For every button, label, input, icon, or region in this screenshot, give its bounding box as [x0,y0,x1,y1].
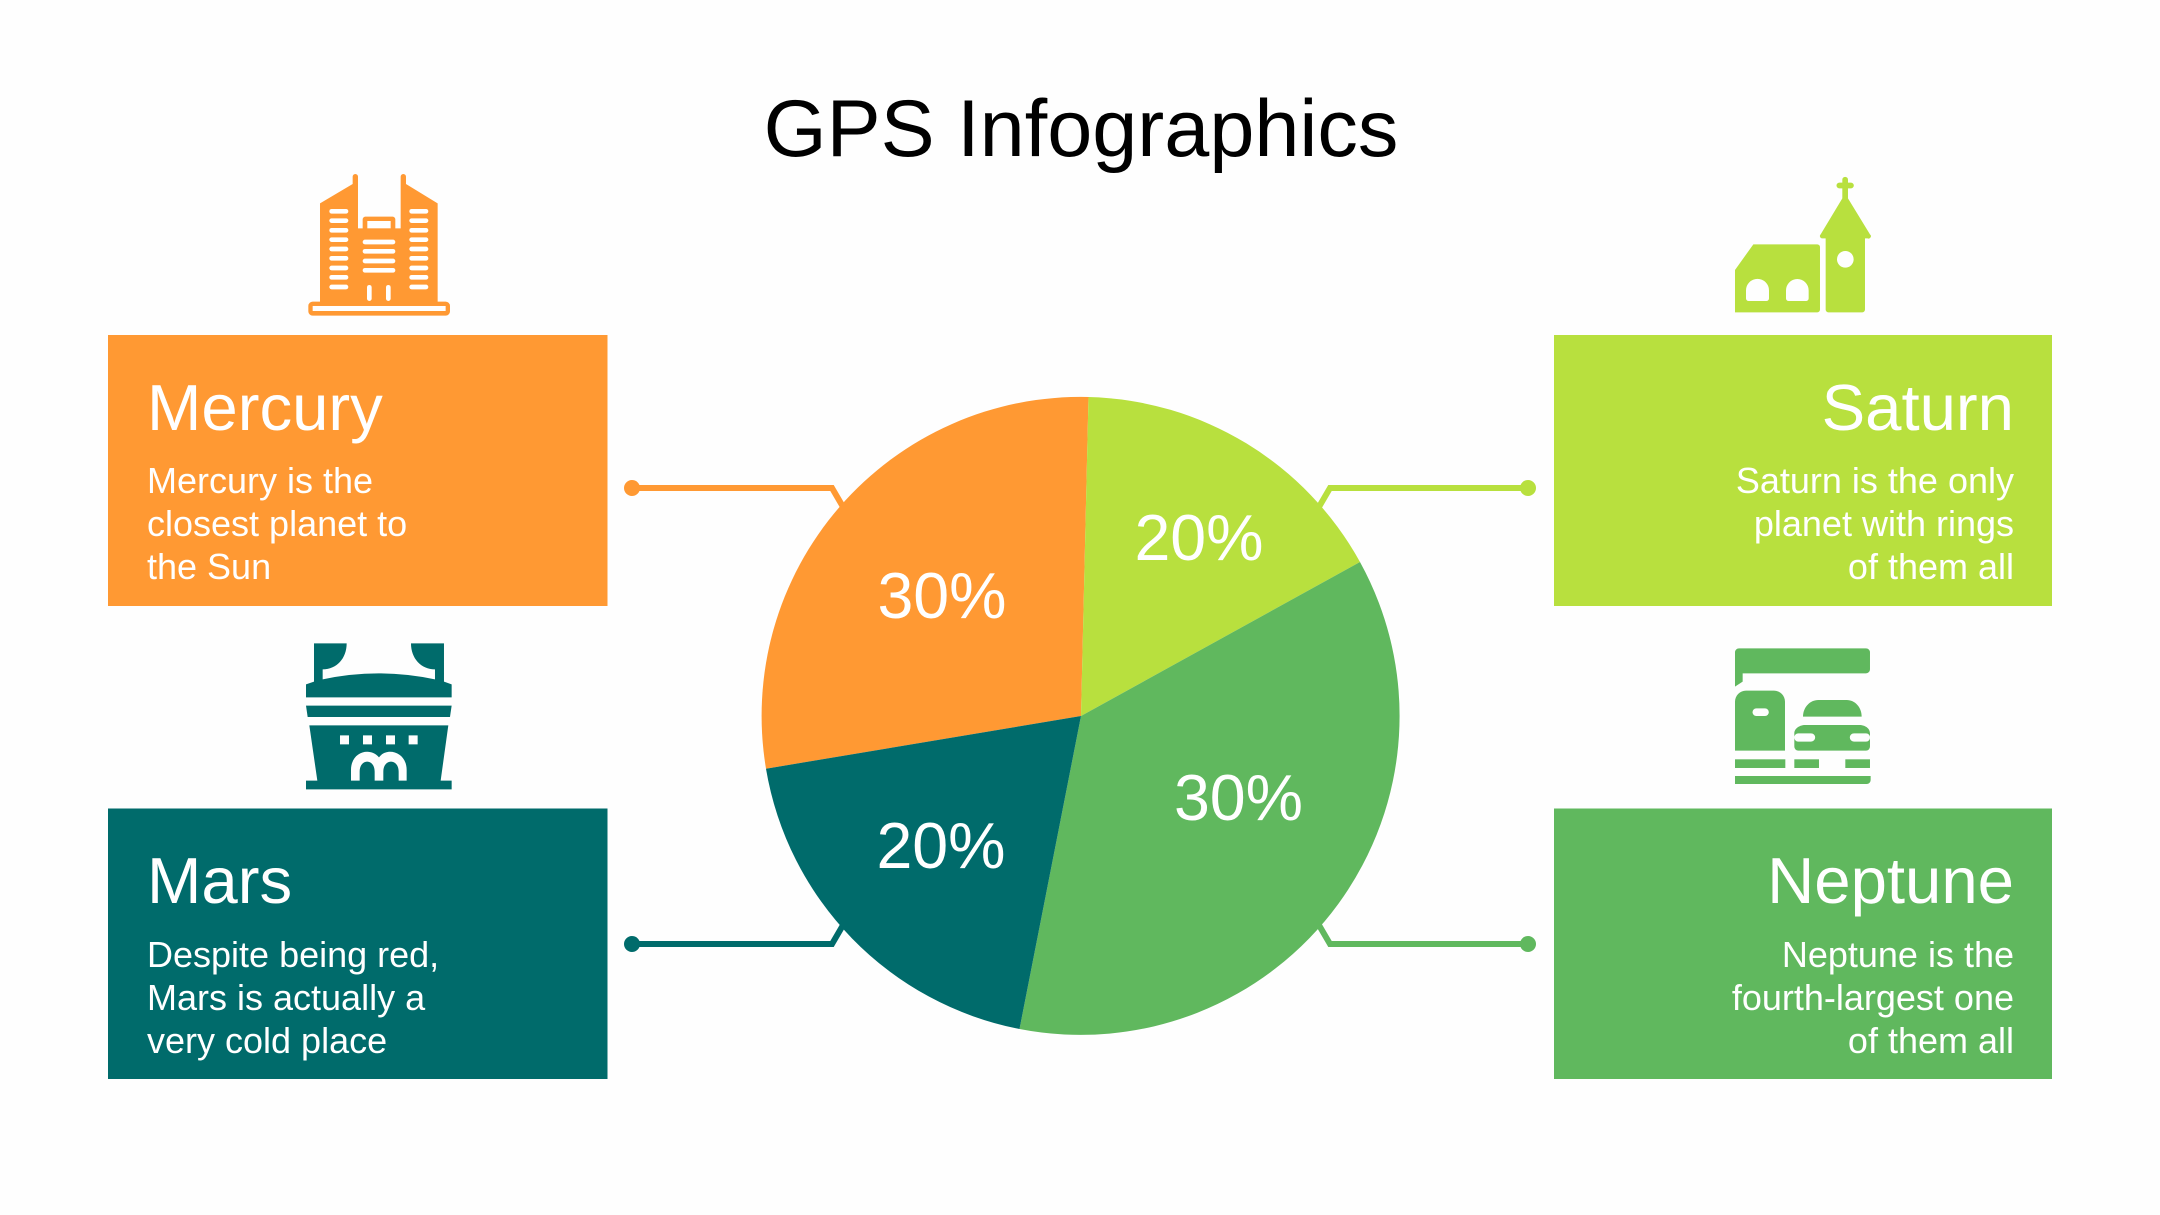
panel: Saturn: planet with rings [1754,503,2014,544]
icon: Neptune car garage [1735,648,1871,784]
slice: lime 20% [1081,397,1360,716]
icon: Mars stadium [306,643,452,789]
panel: Mercury: closest planet to [147,503,407,544]
panel: Neptune: of them all [1848,1020,2014,1061]
icon: Saturn church [1735,177,1871,312]
pie chart [762,397,1400,1035]
panel: Neptune: Neptune is the [1782,934,2014,975]
panel: Neptune: fourth-largest one [1732,977,2014,1018]
connector: Mars [624,920,846,952]
panel: Mercury [108,335,608,606]
panel: Mercury: Mercury [147,371,383,444]
slice: orange 30% [762,397,1088,769]
label: teal 20%: 20% [876,810,1006,882]
connector: Saturn [1316,480,1536,512]
panel: Saturn: Saturn is the only [1736,460,2014,501]
panel: Mars: very cold place [147,1020,387,1061]
title: GPS Infographics [764,84,1398,174]
panel: Saturn [1554,335,2052,606]
slice: green 30% [1020,562,1400,1035]
panel: Saturn: of them all [1848,546,2014,587]
panel: Neptune: Neptune [1767,844,2014,917]
panel: Mercury: Mercury is the [147,460,373,501]
panel: Mercury: the Sun [147,546,271,587]
label: orange 30%: 30% [877,560,1007,632]
panel: Neptune [1554,808,2052,1079]
connector: Mercury [624,480,846,512]
label: green 30%: 30% [1174,762,1303,834]
connector: Neptune [1316,920,1536,952]
icon: Mercury office building [308,174,450,316]
label: lime 20%: 20% [1134,502,1264,574]
panel: Mars [108,808,608,1079]
slice: teal 20% [766,716,1081,1029]
panel: Saturn: Saturn [1822,371,2014,444]
panel: Mars: Mars [147,844,292,917]
panel: Mars: Despite being red, [147,934,439,975]
panel: Mars: Mars is actually a [147,977,426,1018]
